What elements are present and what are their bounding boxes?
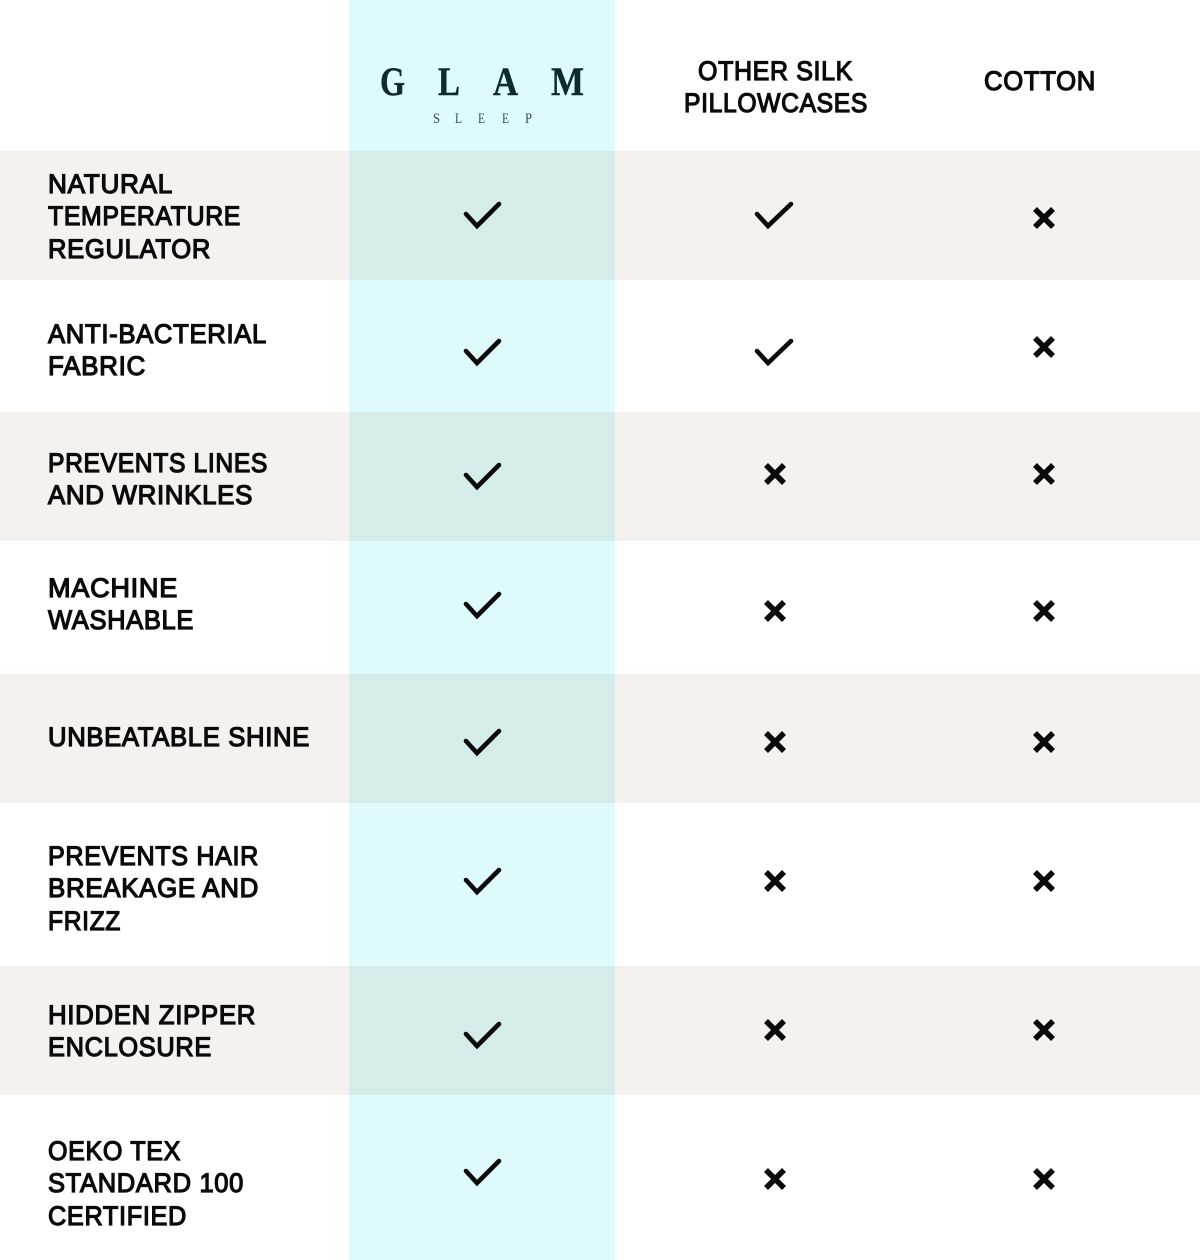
logo: Glam Sleep: S bbox=[433, 111, 440, 127]
check: other silk bbox=[757, 341, 791, 363]
row 2: anti-bacterial fabric bbox=[48, 319, 1053, 381]
cross: other silk bbox=[766, 733, 784, 751]
label: TEMPERATURE bbox=[48, 201, 241, 231]
logo: Glam Sleep: A bbox=[493, 59, 518, 104]
check: glam sleep bbox=[466, 341, 499, 363]
check: glam sleep bbox=[466, 204, 499, 226]
check: glam sleep bbox=[466, 1161, 499, 1183]
label: CERTIFIED bbox=[48, 1201, 187, 1231]
label: AND WRINKLES bbox=[48, 480, 253, 510]
logo: Glam Sleep: L bbox=[438, 59, 460, 104]
label bbox=[48, 1000, 256, 1062]
logo: Glam Sleep bbox=[380, 59, 584, 127]
label: ENCLOSURE bbox=[48, 1032, 212, 1062]
label: FABRIC bbox=[48, 351, 146, 381]
label: ANTI-BACTERIAL bbox=[48, 319, 267, 349]
logo: Glam Sleep: P bbox=[525, 111, 532, 127]
row 5: unbeatable shine bbox=[48, 722, 1053, 753]
label bbox=[48, 448, 268, 510]
cross: other silk bbox=[766, 465, 784, 483]
logo: Glam Sleep: E bbox=[502, 111, 509, 127]
label bbox=[48, 319, 267, 381]
column heading: cotton: COTTON bbox=[984, 66, 1096, 96]
row 6: prevents hair breakage and frizz bbox=[48, 841, 1053, 936]
cross: cotton bbox=[1035, 1021, 1053, 1039]
label bbox=[48, 573, 194, 635]
label: FRIZZ bbox=[48, 906, 121, 936]
cross: other silk bbox=[766, 1021, 784, 1039]
label bbox=[48, 1136, 244, 1231]
cross: other silk bbox=[766, 602, 784, 620]
check: glam sleep bbox=[466, 731, 499, 753]
row 1: natural temperature regulator bbox=[48, 169, 1053, 264]
logo: Glam Sleep: L bbox=[455, 111, 462, 127]
label: BREAKAGE AND bbox=[48, 873, 259, 903]
check: other silk bbox=[757, 204, 791, 226]
label: WASHABLE bbox=[48, 605, 194, 635]
label bbox=[48, 841, 259, 936]
row 3: prevents lines and wrinkles bbox=[48, 448, 1053, 510]
cross: cotton bbox=[1035, 338, 1053, 356]
column heading: other silk pillowcases bbox=[684, 56, 868, 118]
column heading: other silk pillowcases: PILLOWCASES bbox=[684, 88, 868, 118]
label: REGULATOR bbox=[48, 234, 211, 264]
row 8: oeko tex standard 100 certified bbox=[48, 1136, 1053, 1231]
check: glam sleep bbox=[466, 594, 499, 616]
cross: cotton bbox=[1035, 1170, 1053, 1188]
label: OEKO TEX bbox=[48, 1136, 181, 1166]
cross: other silk bbox=[766, 872, 784, 890]
cross: cotton bbox=[1035, 733, 1053, 751]
label: PREVENTS LINES bbox=[48, 448, 268, 478]
label: HIDDEN ZIPPER bbox=[48, 1000, 256, 1030]
label: PREVENTS HAIR bbox=[48, 841, 259, 871]
label: NATURAL bbox=[48, 169, 173, 199]
cross: cotton bbox=[1035, 872, 1053, 890]
cross: cotton bbox=[1035, 602, 1053, 620]
label bbox=[48, 169, 241, 264]
row 4: machine washable bbox=[48, 573, 1053, 635]
check: glam sleep bbox=[466, 465, 499, 487]
label: MACHINE bbox=[48, 573, 178, 603]
check: glam sleep bbox=[466, 1024, 499, 1046]
cross: other silk bbox=[766, 1170, 784, 1188]
logo: Glam Sleep: G bbox=[380, 59, 405, 104]
cross: cotton bbox=[1035, 465, 1053, 483]
column heading: other silk pillowcases: OTHER SILK bbox=[698, 56, 853, 86]
logo: Glam Sleep: E bbox=[478, 111, 485, 127]
check: glam sleep bbox=[466, 870, 499, 892]
label: UNBEATABLE SHINE bbox=[48, 722, 310, 752]
logo: Glam Sleep: M bbox=[551, 59, 584, 104]
cross: cotton bbox=[1035, 209, 1053, 227]
row 7: hidden zipper enclosure bbox=[48, 1000, 1053, 1062]
label: STANDARD 100 bbox=[48, 1168, 244, 1198]
